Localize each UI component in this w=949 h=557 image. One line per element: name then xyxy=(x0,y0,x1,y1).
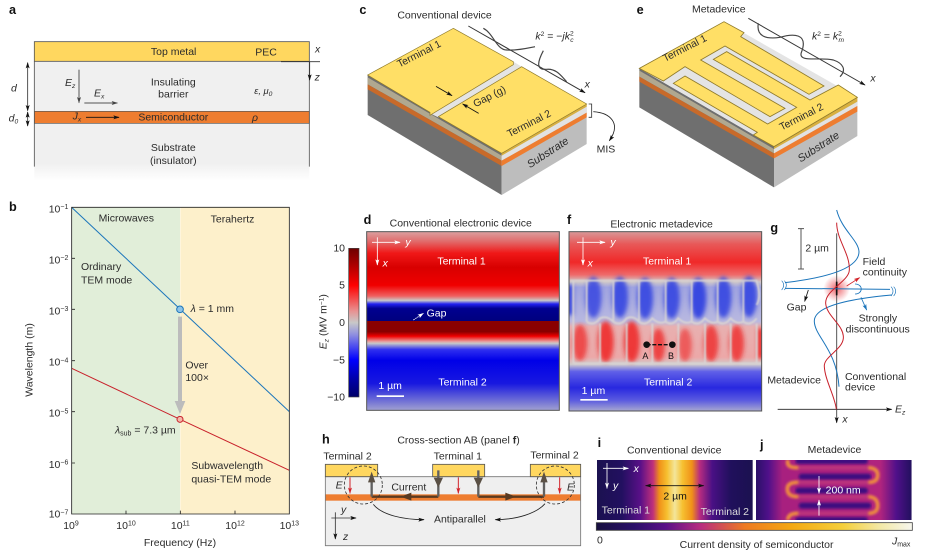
y axis labels: −4 xyxy=(60,357,68,364)
y axis title: Wavelength (m) xyxy=(25,323,36,397)
axes xyxy=(331,505,356,543)
vertical and horizontal axes xyxy=(778,233,906,426)
colour bar labels: −10 xyxy=(327,393,345,404)
y axis labels: 10 xyxy=(49,204,60,215)
layer labels: Insulating xyxy=(151,77,196,88)
grey reduction arrow xyxy=(175,317,185,414)
colour bar labels: 10 xyxy=(333,243,345,254)
blue and red cells xyxy=(568,276,763,362)
red glow xyxy=(823,275,850,302)
vertical and horizontal axes: E xyxy=(895,405,902,416)
gap outline xyxy=(570,281,762,363)
field labels xyxy=(413,257,487,389)
colour bar labels: 5 xyxy=(339,281,345,292)
colour bar labels: Current density of semiconductor xyxy=(680,540,834,551)
title: Conventional electronic device xyxy=(390,219,532,230)
field and current arrows: x xyxy=(77,116,82,123)
wave equation: k xyxy=(535,31,541,42)
current arrowheads xyxy=(368,472,548,501)
colour bar labels: 0 xyxy=(339,318,345,329)
chart annotations xyxy=(81,214,271,485)
x axis and wave xyxy=(468,26,585,93)
x axis labels: 10 xyxy=(128,521,136,528)
y axis labels: 10 xyxy=(49,255,60,266)
annotations: Gap xyxy=(787,303,807,314)
conventional map axes xyxy=(603,463,640,492)
labels: E xyxy=(336,480,344,491)
layer labels: ρ xyxy=(251,113,258,124)
x axis labels: 10 xyxy=(116,521,128,532)
wave equation: 2 xyxy=(541,31,545,38)
scale bar: 1 µm xyxy=(378,381,402,392)
terminal labels: Substrate xyxy=(796,130,842,165)
meander current xyxy=(788,466,869,516)
chart annotations: Subwavelength xyxy=(191,461,263,472)
panel g: field profile: g xyxy=(770,221,778,235)
conventional map axes: y xyxy=(612,481,619,492)
terminal labels xyxy=(643,257,693,389)
chart annotations: quasi-TEM mode xyxy=(191,474,271,485)
annotations: Field xyxy=(863,257,886,268)
y axis labels: 10 xyxy=(49,358,60,369)
field and current arrows xyxy=(65,70,119,123)
y axis labels: −7 xyxy=(60,509,68,516)
panel e: metadevice xyxy=(637,3,876,187)
dashed circles xyxy=(344,466,574,504)
y axis labels xyxy=(49,204,68,521)
field and current arrows: J xyxy=(73,111,78,122)
y axis labels: 10 xyxy=(49,306,60,317)
vertical and horizontal axes: z xyxy=(901,410,906,417)
wave equation: = xyxy=(821,31,833,42)
terminal 2 xyxy=(438,67,587,153)
colour bar labels: 0 xyxy=(597,536,603,547)
x axis and wave xyxy=(748,18,865,85)
chart annotations: TEM mode xyxy=(81,275,132,286)
field and current arrows: E xyxy=(65,78,72,89)
MIS bracket and label: MIS xyxy=(597,145,615,156)
annotations xyxy=(767,257,910,393)
panel c: conventional device xyxy=(359,3,615,195)
wave equation: jk xyxy=(562,31,570,42)
titles: Conventional device xyxy=(627,446,722,457)
panels i and j: current density xyxy=(596,436,912,551)
terminal labels: Terminal 1 xyxy=(643,257,692,268)
front side faces xyxy=(502,104,587,195)
layer labels: (insulator) xyxy=(150,156,197,167)
conventional map xyxy=(597,460,753,520)
y axis labels: −2 xyxy=(60,255,68,262)
x axis labels xyxy=(63,521,299,532)
panel f: metadevice field map xyxy=(567,213,763,411)
annotations: Conventional xyxy=(845,372,906,383)
gap base xyxy=(639,22,857,147)
panel h: cross-section: h xyxy=(322,432,330,446)
markers xyxy=(177,306,183,422)
labels: Current xyxy=(391,483,426,494)
y axis labels: −6 xyxy=(60,460,68,467)
chart annotations: Over xyxy=(185,361,209,372)
200 nm dimension: 200 nm xyxy=(826,486,861,497)
annotations: Strongly xyxy=(859,314,898,325)
terminal labels: Terminal 1 xyxy=(661,33,709,65)
substrate layer xyxy=(34,123,309,180)
insulator body xyxy=(325,477,581,546)
field labels: Gap xyxy=(427,309,447,320)
points A and B xyxy=(642,341,676,361)
gap xyxy=(430,62,522,117)
front side faces xyxy=(774,97,857,187)
terahertz region xyxy=(180,207,289,514)
y axis labels: −1 xyxy=(60,204,68,211)
thickness dimensions: d xyxy=(11,84,18,95)
axis frame and ticks xyxy=(72,207,289,514)
colour bar title: −1 xyxy=(318,297,325,305)
terminal labels: Terminal 1 xyxy=(602,505,650,516)
panel h: cross-section xyxy=(322,432,581,546)
panel a: layer stack xyxy=(9,3,321,181)
field map xyxy=(367,232,559,410)
top metal layer xyxy=(34,42,309,61)
colour bar labels xyxy=(597,536,911,551)
x and z axes xyxy=(281,44,321,83)
panel f: metadevice field map: f xyxy=(567,213,572,227)
x axis labels: 10 xyxy=(280,521,291,532)
section outline xyxy=(325,477,581,546)
chart annotations: Ordinary xyxy=(81,262,122,273)
chart annotations: sub xyxy=(120,431,132,438)
insulating barrier layer xyxy=(34,61,309,111)
title: Cross-section AB (panel f) xyxy=(397,435,520,446)
2 micrometre dimension: 2 µm xyxy=(663,492,687,503)
panel c: conventional device: c xyxy=(359,3,366,17)
panel d: conventional field map: d xyxy=(364,213,371,227)
labels: Terminal 1 xyxy=(434,452,482,463)
axes: z xyxy=(342,532,349,543)
x label: x xyxy=(584,79,591,90)
y axis labels: 10 xyxy=(49,460,60,471)
wave equation: = − xyxy=(544,31,562,42)
panels i and j: current density: j xyxy=(759,438,764,452)
colour bar labels: J xyxy=(892,536,897,547)
conventional device curve xyxy=(782,210,896,387)
current colour bar xyxy=(596,523,912,530)
current path xyxy=(372,470,544,497)
terminal labels: Terminal 2 xyxy=(701,507,749,518)
semiconductor strip xyxy=(325,494,581,501)
layer labels: Substrate xyxy=(151,143,196,154)
chart annotations: Terahertz xyxy=(211,215,254,226)
wave equation: 2 xyxy=(570,31,574,38)
terminal labels: Terminal 2 xyxy=(644,378,693,389)
wave equation: k xyxy=(833,31,838,42)
panel e: metadevice: e xyxy=(637,3,644,17)
terminal labels: Terminal 1 xyxy=(396,39,443,70)
chart annotations: = 7.3 µm xyxy=(131,426,176,437)
x axis labels: 10 xyxy=(171,521,183,532)
chart annotations: 100× xyxy=(185,373,209,384)
axes xyxy=(372,237,411,270)
points A and B: B xyxy=(668,351,674,361)
axes: y xyxy=(609,237,616,248)
wave equation: c xyxy=(570,37,574,44)
x axis title: Frequency (Hz) xyxy=(144,538,216,549)
labels: Terminal 2 xyxy=(530,451,579,462)
chart annotations: λ xyxy=(114,426,120,437)
terminal 1 comb xyxy=(639,22,824,117)
y axis labels: −5 xyxy=(60,408,68,415)
points A and B: A xyxy=(642,351,648,361)
terminal 2 comb xyxy=(673,52,857,147)
x axis labels: 12 xyxy=(237,521,245,528)
field labels: Terminal 1 xyxy=(437,257,486,268)
terminal labels: Terminal 2 xyxy=(506,108,553,140)
terminal 2 left xyxy=(325,464,378,477)
y axis labels: −3 xyxy=(60,306,68,313)
layer labels: Semiconductor xyxy=(138,113,209,124)
colour bar title: (MV m xyxy=(319,305,330,339)
colour bar labels: −5 xyxy=(333,355,345,366)
layer labels: 0 xyxy=(269,91,273,98)
field and current arrows: x xyxy=(100,94,105,101)
terminal 1 centre xyxy=(433,464,485,477)
labels: Antiparallel xyxy=(434,514,486,525)
vertical and horizontal axes: x xyxy=(841,415,848,426)
TEM line xyxy=(72,207,289,412)
x label: x xyxy=(869,74,876,85)
terminal labels xyxy=(396,39,571,171)
x axis labels: 13 xyxy=(291,521,299,528)
chart annotations: Microwaves xyxy=(99,214,154,225)
terminal labels: Terminal 2 xyxy=(778,102,826,133)
layer labels: ε, μ xyxy=(254,86,269,96)
terminal labels: Substrate xyxy=(525,135,571,171)
metadevice map xyxy=(756,460,912,520)
x axis labels: 10 xyxy=(63,521,75,532)
title: Electronic metadevice xyxy=(610,219,713,230)
labels: E xyxy=(567,482,575,493)
panel d: conventional field map xyxy=(318,213,559,410)
field map xyxy=(568,232,763,411)
panel b: wavelength versus frequency chart xyxy=(9,200,299,549)
title: Metadevice xyxy=(692,5,746,16)
meander bends xyxy=(787,460,878,520)
wave equation: m xyxy=(839,37,845,44)
wave equation: k xyxy=(812,31,817,42)
title: Conventional device xyxy=(397,10,492,21)
scale bar: 2 µm xyxy=(805,244,829,255)
layer labels: barrier xyxy=(158,90,189,101)
titles: Metadevice xyxy=(808,445,861,456)
terminal 1 xyxy=(368,28,513,115)
scale bar: 1 µm xyxy=(582,386,605,397)
gap arrows xyxy=(436,86,479,113)
antiparallel arrows xyxy=(373,504,545,520)
y axis labels: 10 xyxy=(49,409,60,420)
labels: Terminal 2 xyxy=(323,452,372,463)
map frame xyxy=(569,232,762,411)
terminal 2 right xyxy=(530,464,581,477)
annotations: Metadevice xyxy=(767,375,821,386)
semiconductor layer xyxy=(34,111,309,123)
meander channels xyxy=(798,461,868,520)
electric field arrows xyxy=(350,477,560,493)
panel g: field profile xyxy=(767,210,910,426)
2 micrometre dimension xyxy=(646,486,704,503)
left side faces xyxy=(368,75,502,195)
MIS bracket and label xyxy=(589,104,615,156)
annotations: device xyxy=(845,382,875,393)
colour bar title: E xyxy=(319,338,331,349)
colour bar title: ) xyxy=(319,294,330,298)
field and current arrows: E xyxy=(94,89,101,100)
x and z axes: x xyxy=(314,44,321,55)
wave equation: 2 xyxy=(838,31,842,38)
annotations: continuity xyxy=(863,268,908,279)
conventional map axes: x xyxy=(633,464,640,475)
panel b: wavelength versus frequency chart: b xyxy=(9,200,17,214)
layer labels: PEC xyxy=(255,48,277,59)
field labels: Terminal 2 xyxy=(438,378,487,389)
substrate fade xyxy=(32,163,313,181)
terminal labels: Gap (g) xyxy=(472,84,508,110)
colour bar xyxy=(349,248,359,397)
wave equation: 2 xyxy=(817,31,821,38)
y axis labels: 10 xyxy=(49,510,60,521)
axes: x xyxy=(382,259,389,270)
titles xyxy=(627,445,861,457)
axes: y xyxy=(404,237,411,248)
colour bar labels: max xyxy=(897,542,911,549)
x axis labels: 9 xyxy=(75,521,79,528)
thickness dimensions: 0 xyxy=(15,119,19,126)
colour bar labels xyxy=(327,243,345,404)
layer labels: Top metal xyxy=(151,47,196,58)
colour bar title: z xyxy=(324,338,331,343)
field and current arrows: z xyxy=(71,83,76,90)
terminal labels xyxy=(602,505,749,518)
axes: x xyxy=(587,259,594,270)
x axis labels: 10 xyxy=(225,521,237,532)
scale bar xyxy=(798,229,829,269)
side edges xyxy=(34,61,309,167)
axes xyxy=(577,237,616,270)
x axis labels: 11 xyxy=(183,521,190,528)
panels i and j: current density: i xyxy=(598,436,601,450)
200 nm dimension xyxy=(819,476,861,516)
thickness dimensions: d xyxy=(9,114,15,125)
layer labels xyxy=(138,47,277,167)
scale bar xyxy=(377,381,404,397)
chart annotations: λ = 1 mm xyxy=(190,304,234,315)
terminal labels xyxy=(661,33,842,165)
x and z axes: z xyxy=(314,72,321,83)
axes: y xyxy=(340,505,347,516)
scale bar xyxy=(580,386,608,401)
quasi-TEM line xyxy=(72,368,289,470)
microwave region xyxy=(72,207,180,514)
annotations: discontinuous xyxy=(846,324,910,335)
labels xyxy=(323,451,579,525)
left side faces xyxy=(639,68,774,187)
panel a: layer stack: a xyxy=(9,3,17,17)
metadevice curve xyxy=(824,223,849,409)
thickness dimensions xyxy=(9,63,28,126)
